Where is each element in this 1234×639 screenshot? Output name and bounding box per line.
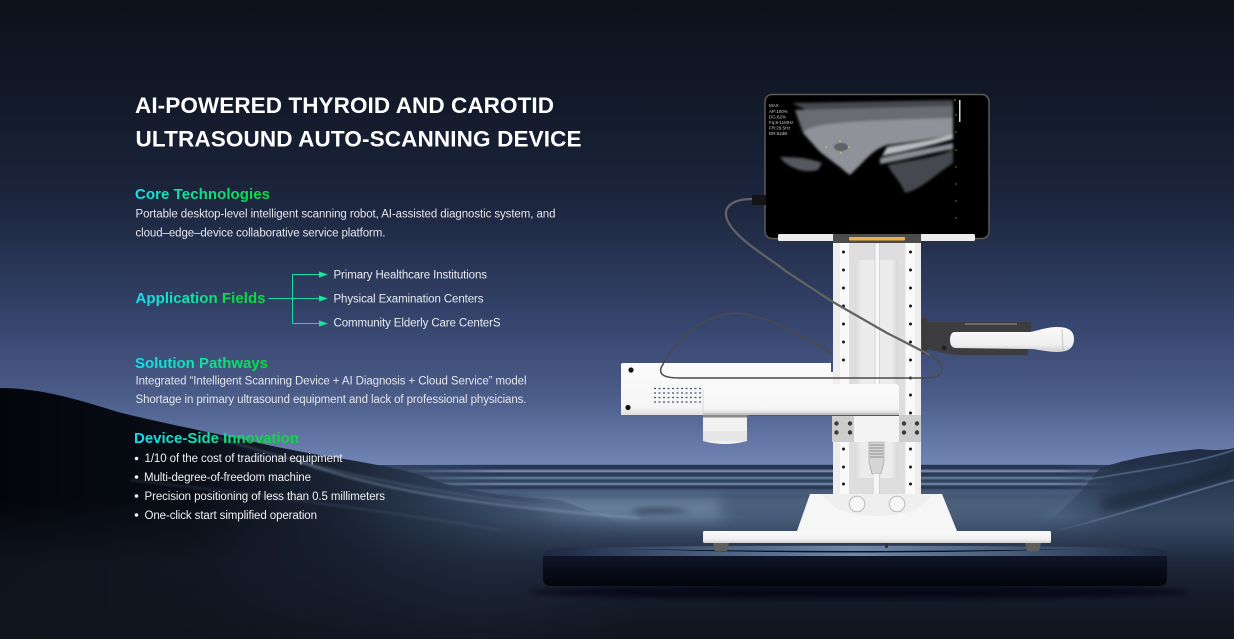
dunes mid-ground	[520, 500, 1050, 528]
text block: core technologies body: Portable desktop-level intelligent scanning robot, AI-assisted diagnostic system, and	[136, 208, 556, 220]
text block: solution pathways body: Integrated “Intelligent Scanning Device + AI Diagnosis + Cloud Service” model	[136, 376, 526, 388]
heading: solution pathways: Solution Pathways	[135, 355, 268, 372]
list: device-side bullets: Multi-degree-of-freedom machine	[144, 472, 311, 484]
heading: application fields: Application Fields	[136, 290, 266, 307]
section: application fields	[136, 270, 501, 330]
list: device-side bullets: 1/10 of the cost of traditional equipment	[144, 453, 343, 465]
section: device-side innovation	[134, 430, 385, 522]
cables	[661, 199, 942, 378]
probe holder and probe	[922, 318, 1074, 355]
platform: round dark pedestal	[530, 546, 1190, 599]
list: application fields: Community Elderly Care CenterS	[334, 318, 501, 330]
list: device-side bullets	[135, 453, 385, 522]
ultrasound scan image: Fq:8-11MHz	[769, 120, 794, 125]
heading: core technologies: Core Technologies	[135, 186, 270, 203]
section: solution pathways	[135, 355, 526, 406]
ultrasound scan image: AP:100%	[769, 109, 788, 114]
text block: core technologies body: cloud–edge–device collaborative service platform.	[136, 228, 386, 240]
text block: solution pathways body: Shortage in primary ultrasound equipment and lack of professional physicians.	[136, 394, 526, 406]
ultrasound scan image: MAX	[769, 103, 779, 108]
bracket and lower column	[832, 415, 921, 494]
text block: solution pathways body	[136, 376, 526, 406]
base with buttons	[703, 494, 1051, 551]
left hill	[0, 388, 640, 639]
front arm and sensor cylinder	[703, 384, 899, 444]
rear arm with vents	[621, 363, 833, 415]
list: application fields	[334, 270, 501, 330]
ultrasound scan image: DR:62dB	[769, 131, 787, 136]
list: application fields: Physical Examination Centers	[334, 294, 484, 306]
title	[135, 93, 582, 152]
list: application fields: Primary Healthcare Institutions	[334, 270, 487, 282]
right hill	[1058, 448, 1234, 536]
tablet mount	[778, 234, 975, 241]
section: core technologies	[135, 186, 556, 240]
ultrasound scan image: DG:62%	[769, 114, 786, 120]
device: ultrasound scanning robot	[621, 94, 1074, 551]
water bands at horizon	[400, 465, 1130, 495]
arrows: branching connector	[268, 272, 328, 326]
title: ULTRASOUND AUTO-SCANNING DEVICE	[136, 126, 582, 152]
list: device-side bullets: One-click start simplified operation	[144, 510, 317, 522]
title: AI-POWERED THYROID AND CAROTID	[135, 93, 554, 118]
column	[833, 243, 921, 494]
tablet with ultrasound image	[752, 94, 989, 243]
ultrasound scan image: FR:29.5Hz	[769, 126, 791, 130]
list: device-side bullets: Precision positioning of less than 0.5 millimeters	[144, 491, 385, 503]
ultrasound scan image	[769, 99, 960, 219]
text block: core technologies body	[136, 208, 556, 240]
heading: device-side innovation: Device-Side Innovation	[134, 430, 299, 447]
